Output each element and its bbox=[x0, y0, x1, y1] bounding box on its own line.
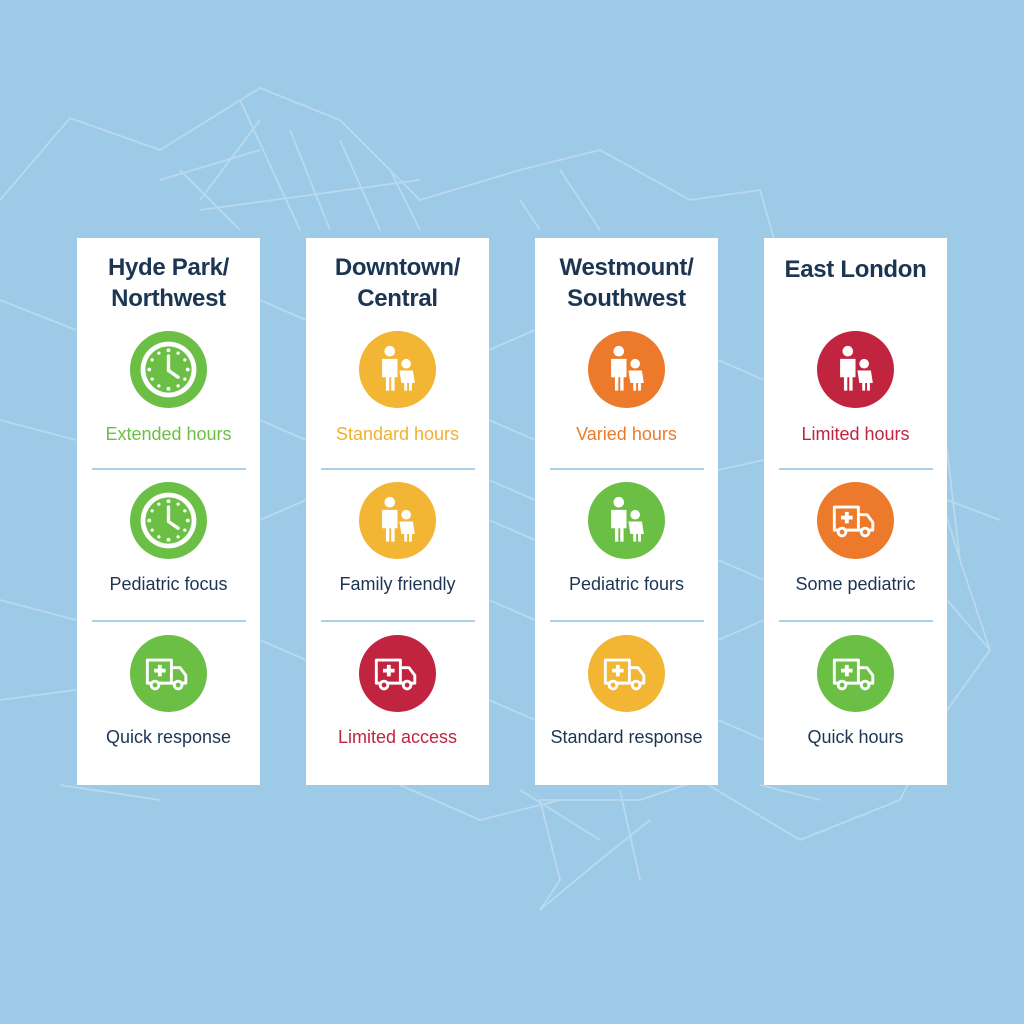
panel: East London bbox=[764, 238, 947, 785]
icon: family green bbox=[588, 482, 665, 559]
heading: Hyde Park: Northwest bbox=[111, 285, 226, 312]
label: Limited access: Limited access bbox=[338, 727, 457, 747]
label: Limited hours: Limited hours bbox=[801, 424, 910, 444]
label: Pediatric fours: Pediatric fours bbox=[569, 574, 684, 594]
icon: clock green bbox=[130, 331, 207, 408]
icon: ambulance red bbox=[359, 635, 436, 712]
heading: East London: East London bbox=[784, 256, 927, 283]
heading: Westmount: Westmount/ bbox=[560, 254, 693, 281]
icon: ambulance orange bbox=[817, 482, 894, 559]
heading: Hyde Park bbox=[108, 254, 230, 312]
label: Extended hours: Extended hours bbox=[105, 424, 232, 444]
label: Family friendly: Family friendly bbox=[339, 574, 456, 594]
label: Standard response: Standard response bbox=[550, 727, 703, 747]
label: Standard hours: Standard hours bbox=[336, 424, 459, 444]
heading: Downtown bbox=[335, 254, 460, 312]
heading: Downtown: Central bbox=[357, 285, 438, 312]
icon: family orange bbox=[588, 331, 665, 408]
icon: ambulance green bbox=[817, 635, 894, 712]
icon: family red bbox=[817, 331, 894, 408]
label: Quick hours: Quick hours bbox=[807, 727, 904, 747]
icon: ambulance yellow bbox=[588, 635, 665, 712]
icon: family yellow bbox=[359, 331, 436, 408]
heading: Westmount: Southwest bbox=[567, 285, 686, 312]
heading: Downtown: Downtown/ bbox=[335, 254, 460, 281]
heading: Westmount bbox=[560, 254, 694, 312]
icon: family yellow 2 bbox=[359, 482, 436, 559]
panel: Downtown/Central bbox=[306, 238, 489, 785]
panel: Hyde Park/Northwest bbox=[77, 238, 260, 785]
label: Some pediatric: Some pediatric bbox=[795, 574, 916, 594]
label: Pediatric focus: Pediatric focus bbox=[109, 574, 228, 594]
label: Varied hours: Varied hours bbox=[576, 424, 677, 444]
panel: Westmount/Southwest bbox=[535, 238, 718, 785]
icon: ambulance green bbox=[130, 635, 207, 712]
label: Quick response: Quick response bbox=[106, 727, 231, 747]
heading: Hyde Park: Hyde Park/ bbox=[108, 254, 229, 281]
icon: clock green 2 bbox=[130, 482, 207, 559]
